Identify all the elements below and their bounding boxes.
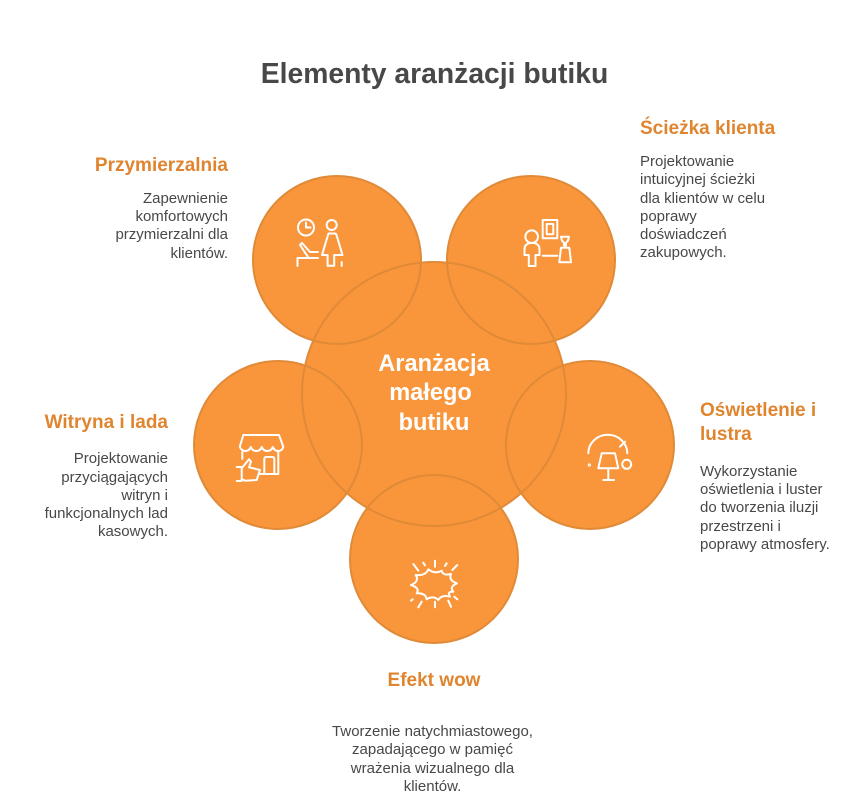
label: przymierzalnia: Zapewnienie [143, 190, 228, 207]
icon: lamp [588, 435, 631, 480]
label: witryna i lada: witryn i [120, 487, 168, 504]
circle outline: ścieżka klienta [447, 176, 615, 344]
label: przymierzalnia: klientów. [170, 245, 228, 262]
label: oświetlenie i lustra [700, 400, 830, 553]
label: witryna i lada: Witryna i lada [45, 412, 168, 433]
label: efekt wow [332, 670, 533, 795]
label: oświetlenie i lustra: oświetlenia i luster [700, 481, 823, 498]
circle outline: oświetlenie i lustra [506, 361, 674, 529]
circle outline: efekt wow [350, 475, 518, 643]
label: ścieżka klienta: Projektowanie [640, 153, 734, 170]
label: ścieżka klienta: dla klientów w celu [640, 190, 765, 207]
label: efekt wow: Efekt wow [388, 670, 481, 691]
label: witryna i lada: kasowych. [98, 523, 168, 540]
label: ścieżka klienta [640, 117, 776, 261]
title: Elementy aranżacji butiku [261, 57, 608, 89]
circle fill: przymierzalnia [253, 176, 421, 344]
label: witryna i lada [45, 412, 168, 540]
label: ścieżka klienta: doświadczeń [640, 226, 727, 243]
center label: Aranżacja [378, 351, 491, 377]
center label [378, 351, 491, 436]
circle outline: witryna i lada [194, 361, 362, 529]
label: oświetlenie i lustra: Wykorzystanie [700, 463, 797, 480]
label: przymierzalnia: przymierzalni dla [115, 226, 229, 243]
label: przymierzalnia [95, 155, 229, 262]
center label: małego [389, 380, 472, 406]
circle fill: efekt wow [350, 475, 518, 643]
circle fill: witryna i lada [194, 361, 362, 529]
label: ścieżka klienta: Ścieżka klienta [640, 117, 776, 139]
diagram: overlapping circles [194, 176, 674, 643]
label: przymierzalnia: Przymierzalnia [95, 155, 228, 176]
label: efekt wow: zapadającego w pamięć [352, 741, 513, 758]
label: ścieżka klienta: zakupowych. [640, 244, 727, 261]
label: oświetlenie i lustra: poprawy atmosfery. [700, 536, 830, 553]
label: witryna i lada: Projektowanie [74, 450, 168, 467]
circle outline: center [302, 262, 566, 526]
center label: butiku [399, 410, 469, 436]
circle fill: center [302, 262, 566, 526]
label: ścieżka klienta: poprawy [640, 208, 697, 225]
icon: wow burst [411, 561, 457, 607]
icon: customer path [524, 220, 571, 266]
label: witryna i lada: funkcjonalnych lad [45, 505, 168, 522]
label: oświetlenie i lustra: Oświetlenie i [700, 400, 816, 421]
icon: storefront and thumb [237, 435, 283, 481]
label: witryna i lada: przyciągających [61, 469, 168, 486]
label: przymierzalnia: komfortowych [135, 208, 228, 225]
circle outline: przymierzalnia [253, 176, 421, 344]
circle fill: ścieżka klienta [447, 176, 615, 344]
label: oświetlenie i lustra: lustra [700, 424, 752, 445]
label: efekt wow: klientów. [404, 778, 461, 795]
label: efekt wow: wrażenia wizualnego dla [350, 760, 515, 777]
label: ścieżka klienta: intuicyjnej ścieżki [640, 171, 755, 188]
icon: fitting room [298, 220, 342, 266]
label: oświetlenie i lustra: przestrzeni i [700, 518, 781, 535]
label: oświetlenie i lustra: do tworzenia iluzji [700, 499, 818, 516]
label: efekt wow: Tworzenie natychmiastowego, [332, 723, 533, 740]
circle fill: oświetlenie i lustra [506, 361, 674, 529]
